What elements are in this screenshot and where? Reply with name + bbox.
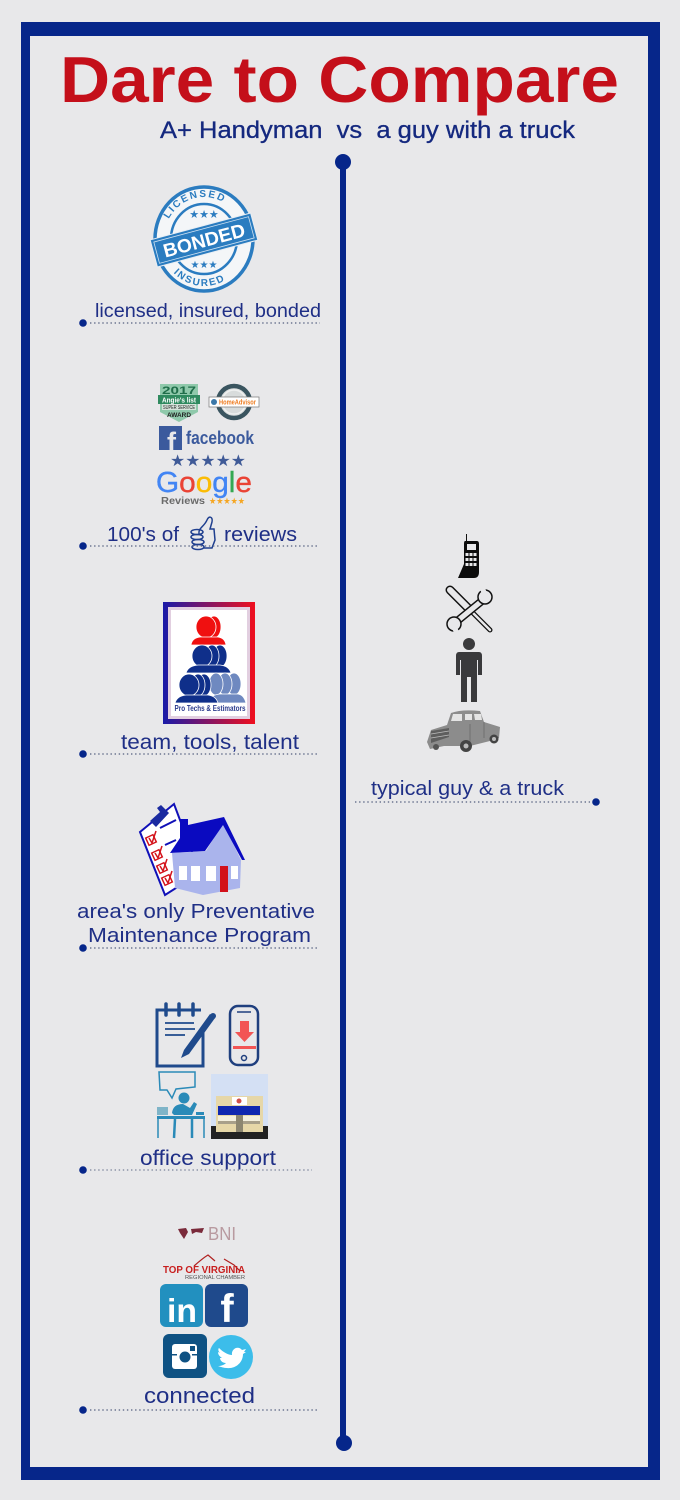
icon: Facebook logo bbox=[159, 426, 255, 457]
label: 100's of reviews bbox=[107, 524, 297, 546]
panel: typical guy and a truck bbox=[355, 534, 600, 806]
icon: Angie's List badge: SUPER SERVICE bbox=[163, 405, 196, 411]
icon: LinkedIn: in bbox=[167, 1292, 197, 1329]
icon: Angie's List badge bbox=[158, 384, 200, 422]
panel: connected bbox=[79, 1224, 317, 1414]
label: office support: office support bbox=[140, 1147, 276, 1170]
icon: Angie's List badge: Angie's list bbox=[162, 398, 197, 404]
icon: bonded stamp: INSURED bbox=[174, 268, 224, 286]
front row figures bbox=[175, 674, 218, 703]
panel: reviews bbox=[79, 384, 318, 550]
icon: LinkedIn bbox=[160, 1284, 203, 1329]
icon: Facebook square: f bbox=[220, 1287, 234, 1331]
title: Dare to Compare bbox=[60, 43, 619, 116]
icon: HomeAdvisor badge: HomeAdvisor bbox=[219, 400, 256, 406]
dotted leader bbox=[79, 1406, 317, 1414]
label: 100's of reviews: reviews bbox=[224, 524, 297, 546]
panel: licensed, insured, bonded bbox=[79, 185, 321, 327]
icon: old pickup truck bbox=[427, 710, 500, 752]
icon: Facebook logo: f bbox=[167, 427, 177, 457]
panel: team, tools, talent bbox=[79, 602, 318, 758]
icon: Angie's List badge: AWARD bbox=[167, 412, 191, 419]
icon: Facebook square bbox=[205, 1284, 248, 1331]
icon: bonded stamp: ★★★ bbox=[191, 260, 217, 271]
label: 100's of reviews: 100's of bbox=[107, 524, 179, 546]
label: typical guy & a truck: typical guy & a truck bbox=[371, 778, 565, 800]
red leader figure bbox=[191, 616, 226, 645]
icon: Instagram bbox=[163, 1334, 207, 1378]
icon: Facebook logo: facebook bbox=[186, 428, 255, 448]
icon: HomeAdvisor badge bbox=[209, 386, 259, 418]
icon: checklist and house bbox=[140, 804, 245, 895]
panel: office support bbox=[79, 1004, 312, 1174]
icon: BNI logo: BNI bbox=[208, 1224, 236, 1244]
icon: Angie's List badge: 2017 bbox=[162, 385, 196, 397]
icon: bonded stamp bbox=[150, 185, 258, 293]
icon: notepad and pencil bbox=[157, 1004, 216, 1066]
icon: Twitter bbox=[209, 1335, 253, 1379]
label: Maintenance Program: Maintenance Program bbox=[88, 925, 311, 947]
icon: thumbs up with coins bbox=[191, 517, 215, 550]
icon: standing man bbox=[456, 638, 482, 702]
label: team, tools, talent: team, tools, talent bbox=[121, 731, 299, 754]
dotted leader bbox=[79, 319, 320, 327]
icon: cell phone bbox=[458, 534, 479, 578]
icon: pro techs team badge: Pro Techs & Estimators bbox=[174, 704, 246, 713]
icon: pro techs team badge bbox=[163, 602, 255, 724]
icon: Google reviews logo: Google bbox=[156, 467, 252, 499]
dotted leader bbox=[79, 750, 318, 758]
timeline spine bbox=[335, 154, 352, 1451]
light row figures bbox=[207, 673, 246, 703]
label: area's only Preventative: area's only Preventative bbox=[77, 901, 315, 923]
icon: crossed tools bbox=[447, 586, 492, 635]
label: connected: connected bbox=[144, 1383, 255, 1408]
dotted leader bbox=[79, 944, 318, 952]
panel: preventative maintenance bbox=[77, 804, 318, 952]
icon: Google reviews logo: ★★★★★ bbox=[209, 496, 245, 506]
icon: Google reviews logo: Reviews bbox=[161, 496, 205, 507]
icon: bonded stamp: ★★★ bbox=[189, 209, 219, 221]
icon: Top of Virginia chamber logo: REGIONAL CHAMBER bbox=[185, 1275, 245, 1281]
dotted leader bbox=[79, 542, 318, 550]
icon: person at desk with speech bubble bbox=[157, 1072, 205, 1138]
dotted leader bbox=[355, 798, 600, 806]
icon: BNI logo bbox=[178, 1224, 236, 1244]
subtitle: A+ Handyman vs a guy with a truck bbox=[160, 117, 576, 144]
icon: bonded stamp: LICENSED bbox=[163, 190, 224, 218]
middle row figures bbox=[186, 645, 231, 673]
dotted leader bbox=[79, 1166, 312, 1174]
icon: bonded stamp: BONDED bbox=[161, 220, 248, 262]
icon: five stars: ★★★★★ bbox=[170, 453, 246, 470]
label: licensed, insured, bonded: licensed, insured, bonded bbox=[95, 301, 321, 322]
icon: Top of Virginia chamber logo: TOP OF VIRGINIA bbox=[163, 1265, 245, 1276]
icon: phone with download arrow bbox=[230, 1006, 258, 1065]
icon: office building bbox=[211, 1074, 268, 1139]
icon: Top of Virginia chamber logo bbox=[163, 1255, 245, 1281]
